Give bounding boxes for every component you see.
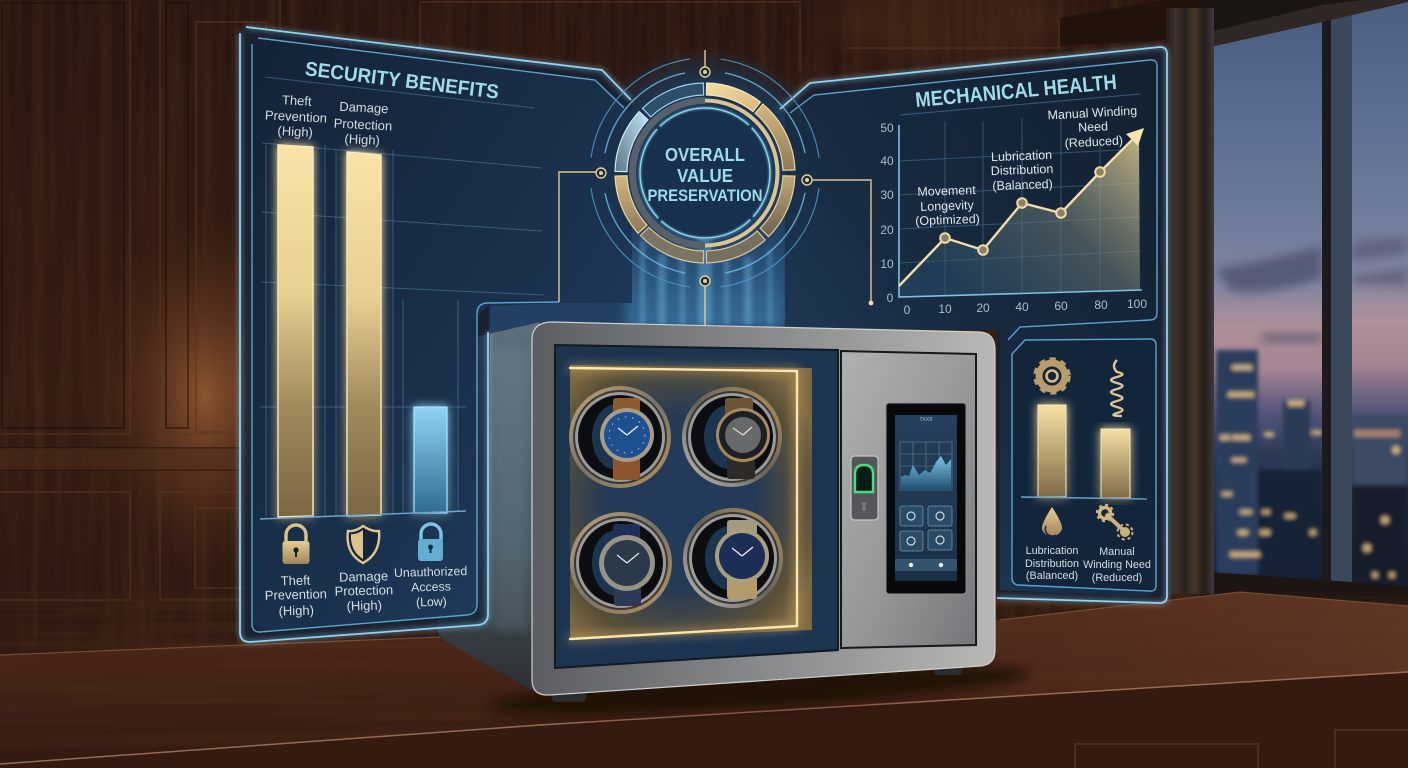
panel: mechanical health — [780, 47, 1167, 603]
centre title: OVERALL — [665, 145, 745, 165]
label: lubrication distribution: Lubrication — [1026, 545, 1078, 557]
top label: damage protection: Protection — [333, 115, 393, 134]
bottom label: damage protection: Protection — [334, 582, 393, 599]
panel frame: security benefits — [240, 27, 631, 642]
watch winder 3: dark blue dial — [570, 512, 672, 614]
centre title: PRESERVATION — [648, 186, 762, 205]
safe: left side face — [437, 322, 540, 695]
label: lubrication distribution: (Balanced) — [1026, 570, 1078, 582]
label: manual winding need: Manual Winding — [1047, 104, 1137, 122]
y axis labels: 10 — [880, 257, 894, 271]
bottom label: unauthorized access — [394, 564, 468, 610]
watch winder 2: grey dial — [682, 387, 782, 487]
label: manual winding need: Manual — [1099, 546, 1135, 558]
bottom label: theft prevention — [264, 572, 328, 619]
grid lines: security — [260, 77, 544, 517]
fingerprint reader — [851, 456, 878, 520]
y axis labels: 50 — [880, 121, 894, 135]
ring segments — [615, 83, 795, 263]
icon: gear — [1035, 359, 1069, 393]
blue door frame — [555, 345, 838, 668]
label: manual winding need: Need — [1078, 119, 1108, 135]
connector: right node to mechanical panel — [802, 175, 873, 305]
top label: theft prevention: Theft — [282, 92, 312, 109]
bottom label: unauthorized access: Access — [411, 579, 451, 595]
top label: theft prevention — [264, 91, 328, 141]
label: movement longevity: (Optimized) — [915, 212, 980, 228]
centre title: VALUE — [677, 166, 733, 186]
label: lubrication distribution — [1025, 545, 1079, 582]
label: lubrication distribution: Distribution — [1025, 558, 1079, 570]
top label: theft prevention: (High) — [277, 123, 313, 140]
outer thin arcs — [576, 44, 834, 302]
label: lubrication distribution: (Balanced) — [992, 177, 1053, 193]
x axis labels — [904, 297, 1147, 317]
label: manual winding need: (Reduced) — [1064, 133, 1123, 150]
label: movement longevity — [914, 183, 980, 228]
inner dial — [613, 81, 797, 265]
bottom label: damage protection — [334, 568, 394, 614]
top label: damage protection: (High) — [344, 131, 380, 148]
label: lubrication distribution — [990, 148, 1054, 193]
heading: security benefits: SECURITY BENEFITS — [304, 58, 500, 104]
steel body — [532, 322, 995, 695]
icon: spring — [1111, 360, 1122, 416]
x axis labels: 100 — [1127, 297, 1147, 311]
bars baseline — [260, 511, 466, 519]
watch winder 4: navy dial — [683, 508, 783, 608]
holographic panel background connecting the two panels — [488, 46, 835, 334]
bar: winding — [1101, 429, 1130, 498]
label: manual winding need: Winding Need — [1083, 559, 1151, 571]
centre title — [648, 145, 762, 205]
bar: unauthorized access — [414, 407, 447, 513]
panel: security benefits — [240, 27, 632, 642]
label: lubrication distribution: Distribution — [991, 162, 1054, 178]
y axis labels: 20 — [880, 223, 894, 237]
bottom label: unauthorized access: Unauthorized — [394, 564, 468, 580]
line chart: mechanical health — [899, 118, 1144, 297]
top label: damage protection: Damage — [339, 99, 389, 116]
connector: left node to security panel — [559, 168, 606, 302]
baseline — [1021, 497, 1147, 499]
bottom label: theft prevention: Prevention — [265, 586, 327, 603]
x axis labels: 40 — [1015, 300, 1029, 314]
divider under heading — [900, 94, 1140, 115]
bar: lubrication — [1038, 405, 1066, 497]
central gauge: overall value preservation — [576, 44, 834, 302]
bar: theft prevention — [278, 145, 313, 517]
top label: damage protection — [333, 99, 393, 149]
bottom label: unauthorized access: (Low) — [416, 595, 447, 609]
x axis labels: 20 — [976, 301, 990, 315]
curtain — [1166, 8, 1214, 594]
heading: mechanical health: MECHANICAL HEALTH — [914, 71, 1118, 112]
window with dusk city skyline — [1200, 0, 1408, 606]
connector: top node — [700, 50, 710, 77]
watch winder 1: blue dial — [569, 386, 671, 488]
panel frame: mechanical health — [780, 47, 1167, 603]
bottom label: theft prevention: (High) — [278, 603, 314, 618]
touchscreen — [886, 403, 966, 594]
screen footer — [895, 559, 957, 571]
bottom label: theft prevention: Theft — [280, 573, 311, 588]
feet — [552, 664, 962, 702]
watch winder safe — [532, 322, 995, 702]
icon: blue padlock — [418, 524, 443, 561]
screen buttons — [900, 506, 952, 551]
sub-panel: lubrication and winding bars — [1012, 339, 1156, 591]
label: lubrication distribution: Lubrication — [991, 148, 1052, 164]
connector: bottom node — [700, 276, 710, 326]
bar: damage protection — [347, 152, 381, 516]
x axis labels: 60 — [1054, 299, 1068, 313]
icon: gold padlock — [282, 525, 310, 564]
label: manual winding need: (Reduced) — [1092, 572, 1142, 584]
x axis labels: 0 — [904, 303, 911, 317]
label: manual winding need — [1083, 546, 1151, 584]
screen chart — [900, 442, 952, 490]
y axis labels — [880, 121, 894, 305]
bottom label: damage protection: (High) — [346, 598, 382, 613]
wooden desk — [0, 592, 1408, 768]
left panel edge over safe body — [487, 332, 489, 614]
icon: oil drop — [1042, 507, 1062, 536]
y axis labels: 30 — [880, 188, 894, 202]
label: movement longevity: Movement — [917, 183, 976, 199]
touchscreen: TXXX — [919, 417, 933, 423]
label: manual winding need — [1047, 104, 1139, 151]
label: movement longevity: Longevity — [920, 198, 975, 214]
x axis labels: 10 — [938, 302, 952, 316]
bottom label: damage protection: Damage — [339, 568, 388, 585]
icon: winding gears — [1097, 505, 1132, 540]
y axis labels: 0 — [887, 291, 894, 305]
LED strip — [570, 368, 797, 639]
lit interior — [570, 365, 812, 640]
icon: shield — [348, 526, 379, 563]
brushed steel door — [841, 351, 976, 648]
x axis labels: 80 — [1094, 298, 1108, 312]
top label: theft prevention: Prevention — [265, 107, 327, 126]
y axis labels: 40 — [880, 154, 894, 168]
